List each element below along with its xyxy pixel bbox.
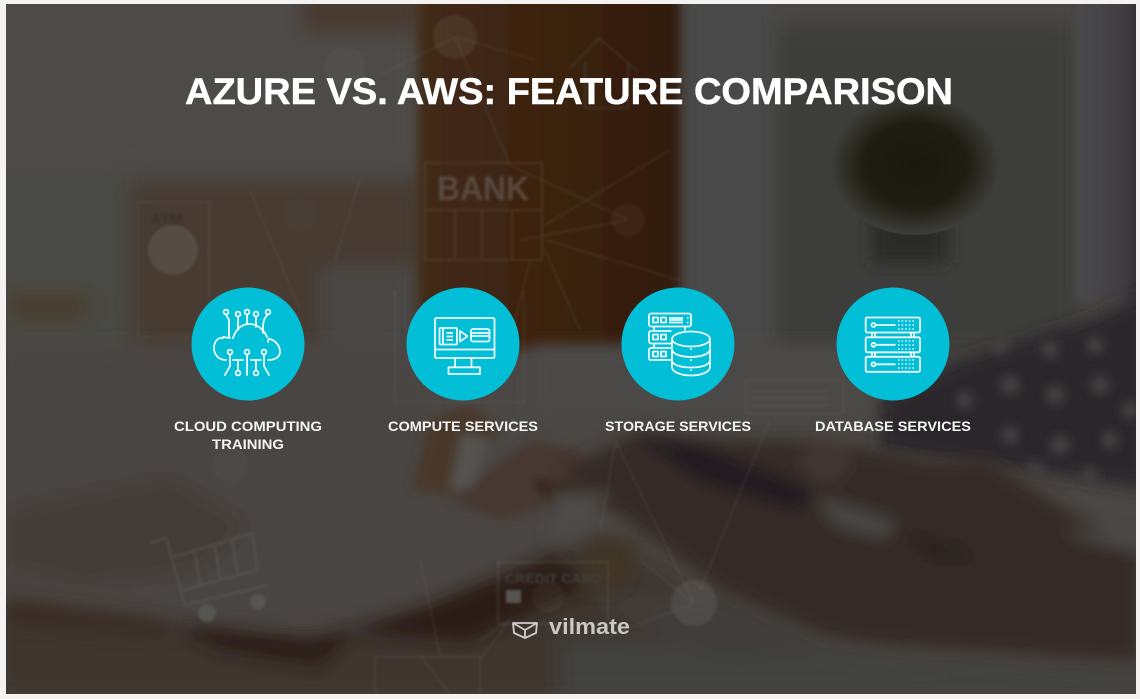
shopping cart icon xyxy=(150,533,268,621)
label: COMPUTE SERVICES xyxy=(388,418,538,434)
BANK icon: BANK xyxy=(437,170,529,208)
icon: servers and database xyxy=(622,288,734,400)
left hand on laptop xyxy=(412,404,611,520)
plant silhouette xyxy=(830,95,1000,263)
ATM icon: ATM xyxy=(151,211,182,228)
label: STORAGE SERVICES xyxy=(605,418,751,434)
label: TRAINING xyxy=(212,436,284,452)
logo: vilmate xyxy=(513,614,630,639)
background network icons xyxy=(148,15,717,626)
credit card icon: CREDIT CARD xyxy=(505,571,602,586)
background network lines xyxy=(454,37,668,625)
label: DATABASE SERVICES xyxy=(815,418,971,434)
outlined boxes xyxy=(524,292,525,343)
panel: cloud computing training xyxy=(174,288,322,452)
panel: compute services xyxy=(388,288,538,434)
logo: vilmate: vilmate xyxy=(549,614,630,639)
icon: monitor xyxy=(406,288,520,400)
credit card icon xyxy=(498,562,608,624)
laptop xyxy=(6,484,965,694)
BANK icon xyxy=(425,163,542,260)
label: CLOUD COMPUTING xyxy=(174,418,322,434)
ATM icon xyxy=(153,214,181,224)
title: AZURE VS. AWS: FEATURE COMPARISON xyxy=(185,71,953,112)
icon: cloud circuit xyxy=(192,288,304,400)
panel: database services xyxy=(815,288,971,434)
right hand holding phone xyxy=(550,430,1140,662)
house icon xyxy=(570,38,638,108)
panel: storage services xyxy=(605,288,751,434)
icon: server rack xyxy=(836,288,950,400)
icon: vilmate envelope xyxy=(513,623,537,638)
polka-dot fabric xyxy=(530,290,1140,490)
